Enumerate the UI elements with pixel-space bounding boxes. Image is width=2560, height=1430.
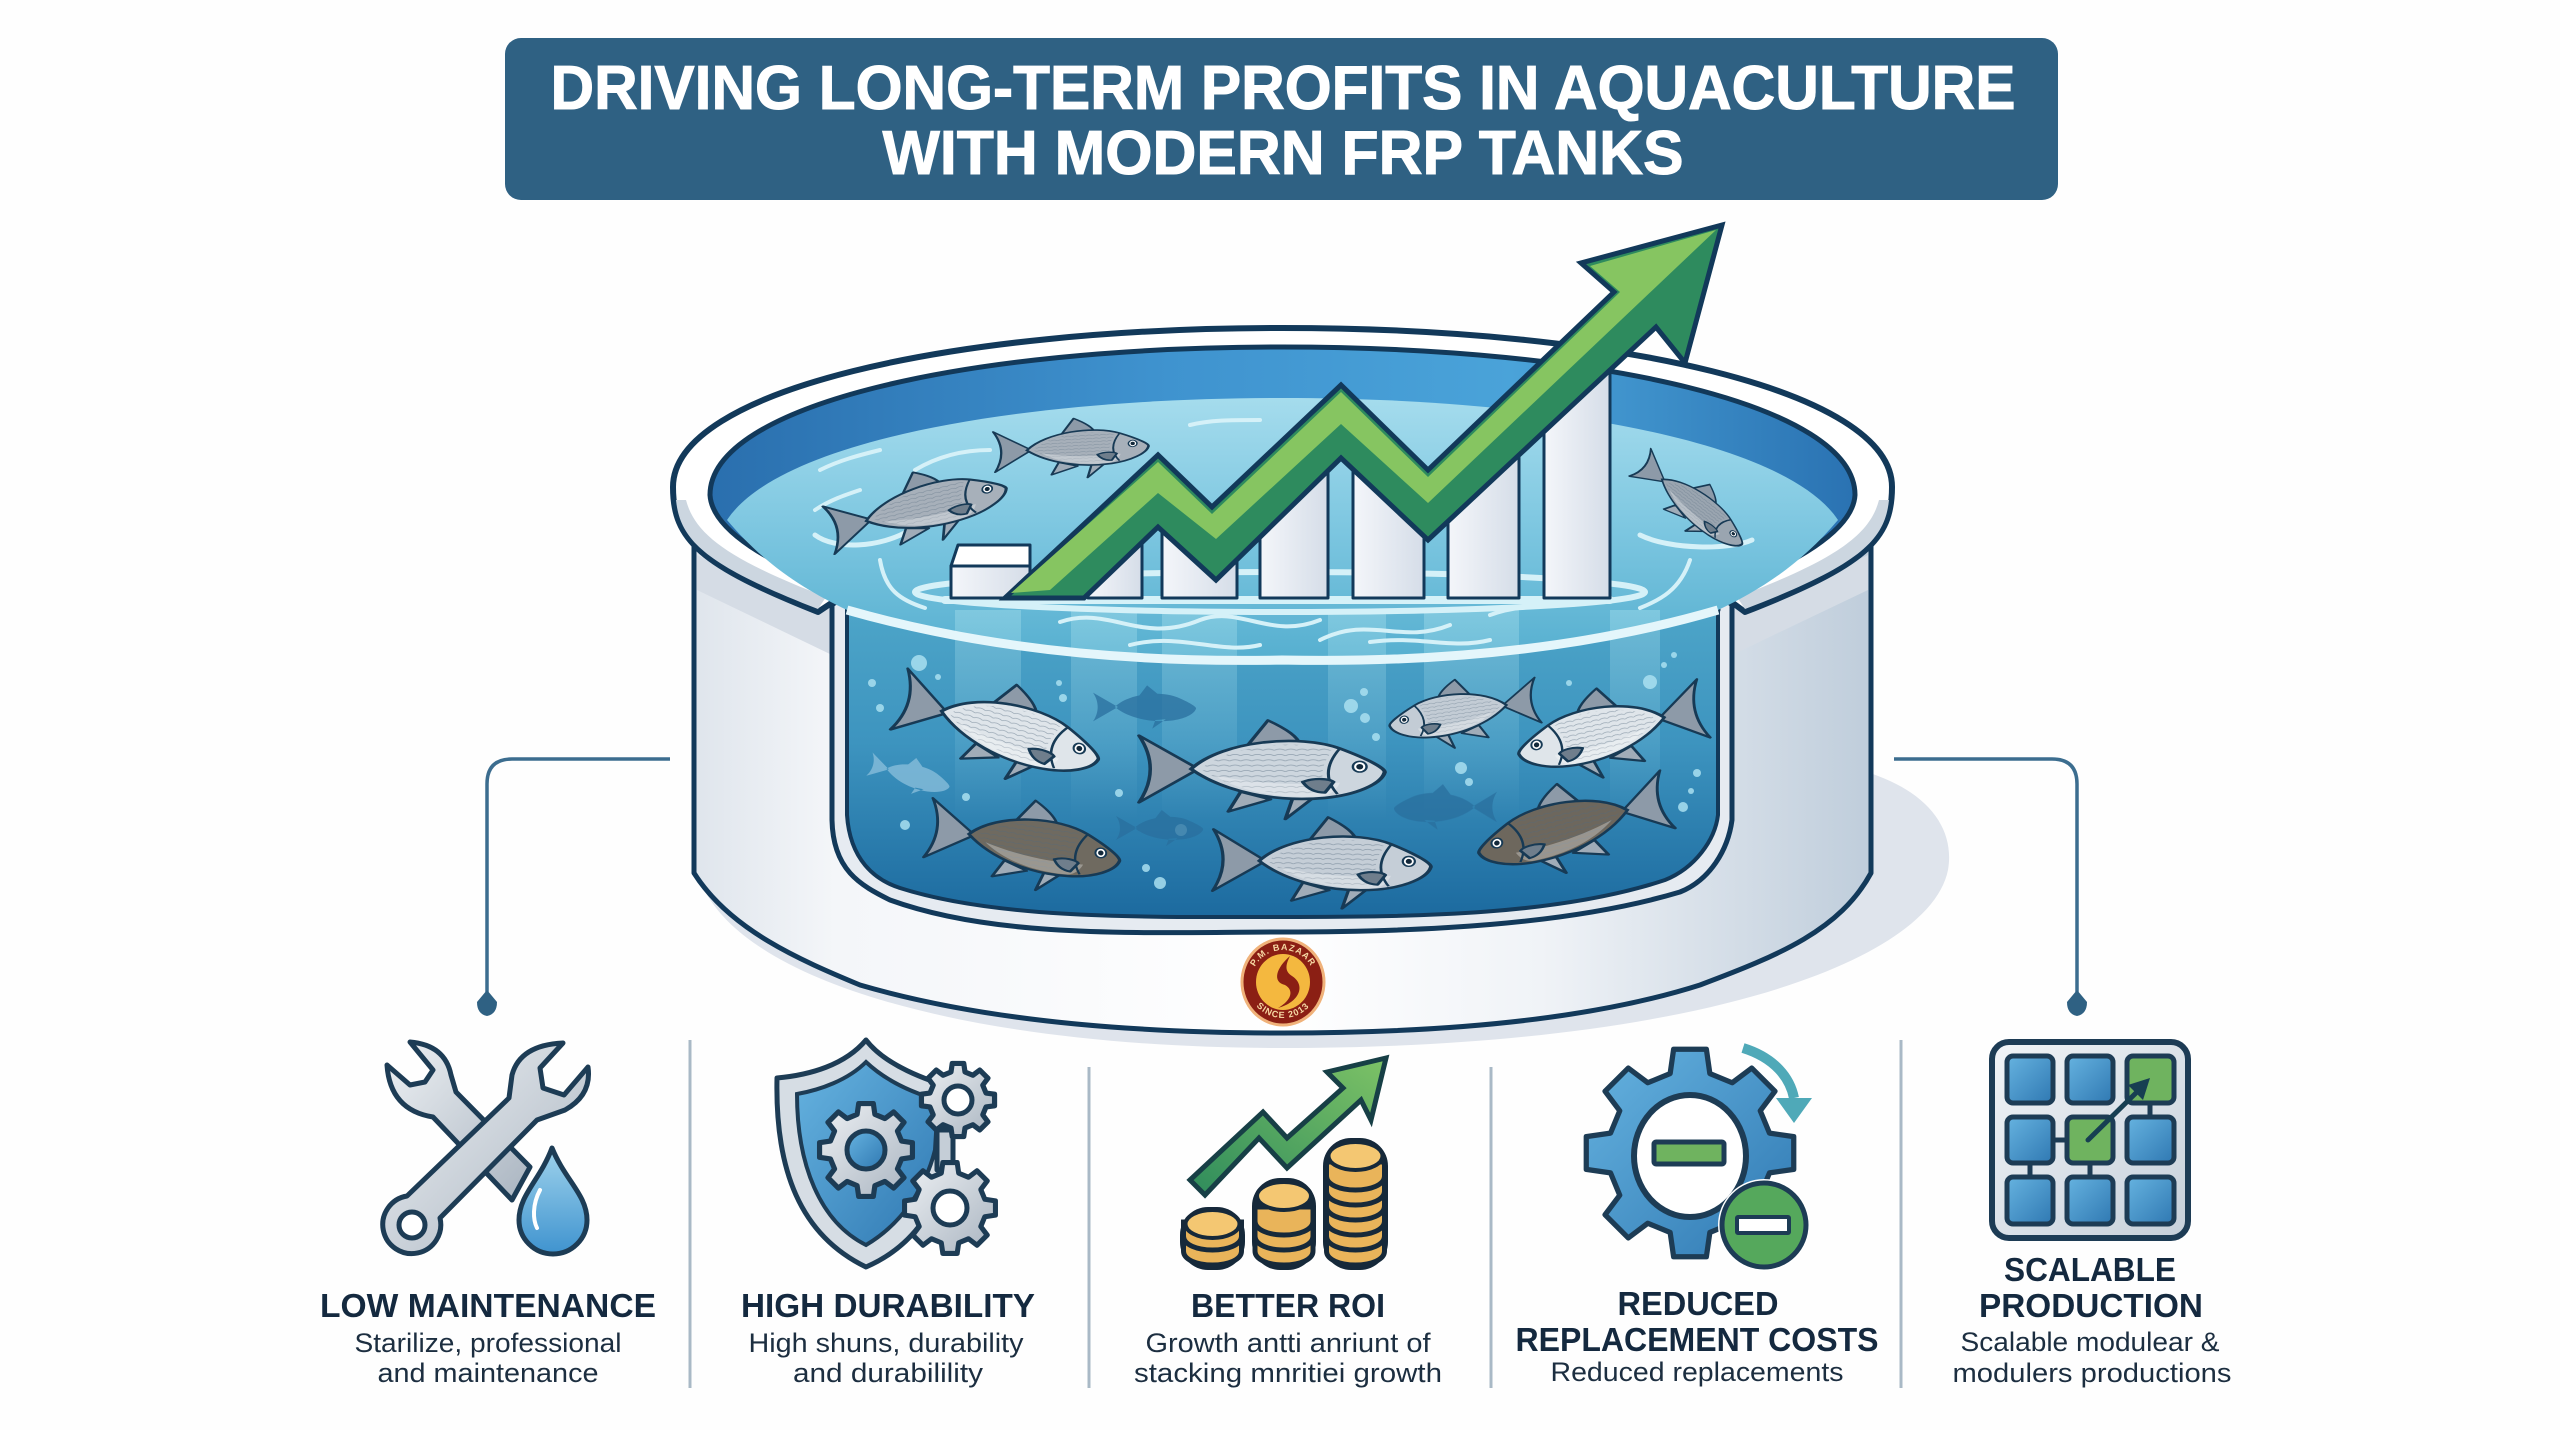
water surface bbox=[727, 398, 1838, 665]
description line 2: stacking mnritiei growth bbox=[1134, 1358, 1442, 1388]
panel: low maintenance bbox=[320, 1042, 656, 1388]
surface ripples bbox=[815, 420, 1752, 648]
description line 2: and maintenance bbox=[378, 1358, 598, 1388]
panel: reduced replacement costs bbox=[1516, 1048, 1878, 1387]
bubbles bbox=[868, 652, 1701, 889]
description: Reduced replacements bbox=[1550, 1357, 1844, 1387]
connector: right bbox=[1894, 759, 2087, 1016]
description line 2: and durabilility bbox=[793, 1358, 984, 1388]
icon: coins and growth arrow bbox=[1180, 1058, 1388, 1270]
connector: left bbox=[477, 759, 670, 1016]
inner wall bbox=[710, 347, 1855, 592]
icon: gear with minus bbox=[1586, 1048, 1812, 1271]
heading: SCALABLE bbox=[2004, 1251, 2176, 1288]
column dividers bbox=[690, 1040, 1901, 1388]
panel: scalable production bbox=[1952, 1042, 2232, 1388]
description: High shuns, durability bbox=[748, 1328, 1024, 1358]
cutaway frame bbox=[832, 592, 1732, 933]
description: Scalable modulear & bbox=[1960, 1327, 2220, 1357]
background fish silhouettes bbox=[865, 685, 1497, 846]
tank rim bbox=[673, 328, 1892, 612]
cutaway water bbox=[847, 600, 1718, 917]
ground shadow bbox=[700, 770, 1949, 1048]
tank body bbox=[694, 540, 1871, 1033]
panel: better ROI bbox=[1134, 1058, 1442, 1388]
panel: high durability bbox=[741, 1040, 1035, 1388]
fish school bbox=[886, 655, 1714, 910]
heading line 2: REPLACEMENT COSTS bbox=[1516, 1321, 1878, 1358]
title line 2: WITH MODERN FRP TANKS bbox=[882, 119, 1684, 188]
icon: modular grid bbox=[1992, 1042, 2188, 1238]
description line 2: modulers productions bbox=[1952, 1358, 2232, 1388]
light rays bbox=[955, 610, 1660, 778]
heading: BETTER ROI bbox=[1191, 1287, 1385, 1324]
bar chart bbox=[951, 365, 1610, 598]
heading: HIGH DURABILITY bbox=[741, 1287, 1035, 1324]
brand badge: P.M. BAZAAR bbox=[1250, 944, 1315, 966]
FRP tank bbox=[670, 222, 1895, 1072]
icon: shield and gears bbox=[777, 1040, 995, 1267]
surface fish bbox=[820, 415, 1759, 566]
rim underside shadow bbox=[697, 555, 1868, 655]
growth arrow bbox=[1005, 225, 1722, 598]
heading: LOW MAINTENANCE bbox=[320, 1287, 656, 1324]
description: Starilize, professional bbox=[354, 1328, 622, 1358]
title line 1: DRIVING LONG-TERM PROFITS IN AQUACULTURE bbox=[550, 54, 2016, 123]
description: Growth antti anriunt of bbox=[1146, 1328, 1431, 1358]
title banner bbox=[505, 38, 2058, 200]
rim shading bbox=[676, 500, 1889, 609]
heading line 2: PRODUCTION bbox=[1979, 1287, 2203, 1324]
icon: wrenches and water drop bbox=[383, 1042, 589, 1254]
brand badge bbox=[1240, 938, 1326, 1026]
surface front edge bbox=[847, 610, 1718, 660]
heading: REDUCED bbox=[1618, 1285, 1778, 1322]
brand badge: SINCE 2013 bbox=[1257, 1002, 1308, 1018]
